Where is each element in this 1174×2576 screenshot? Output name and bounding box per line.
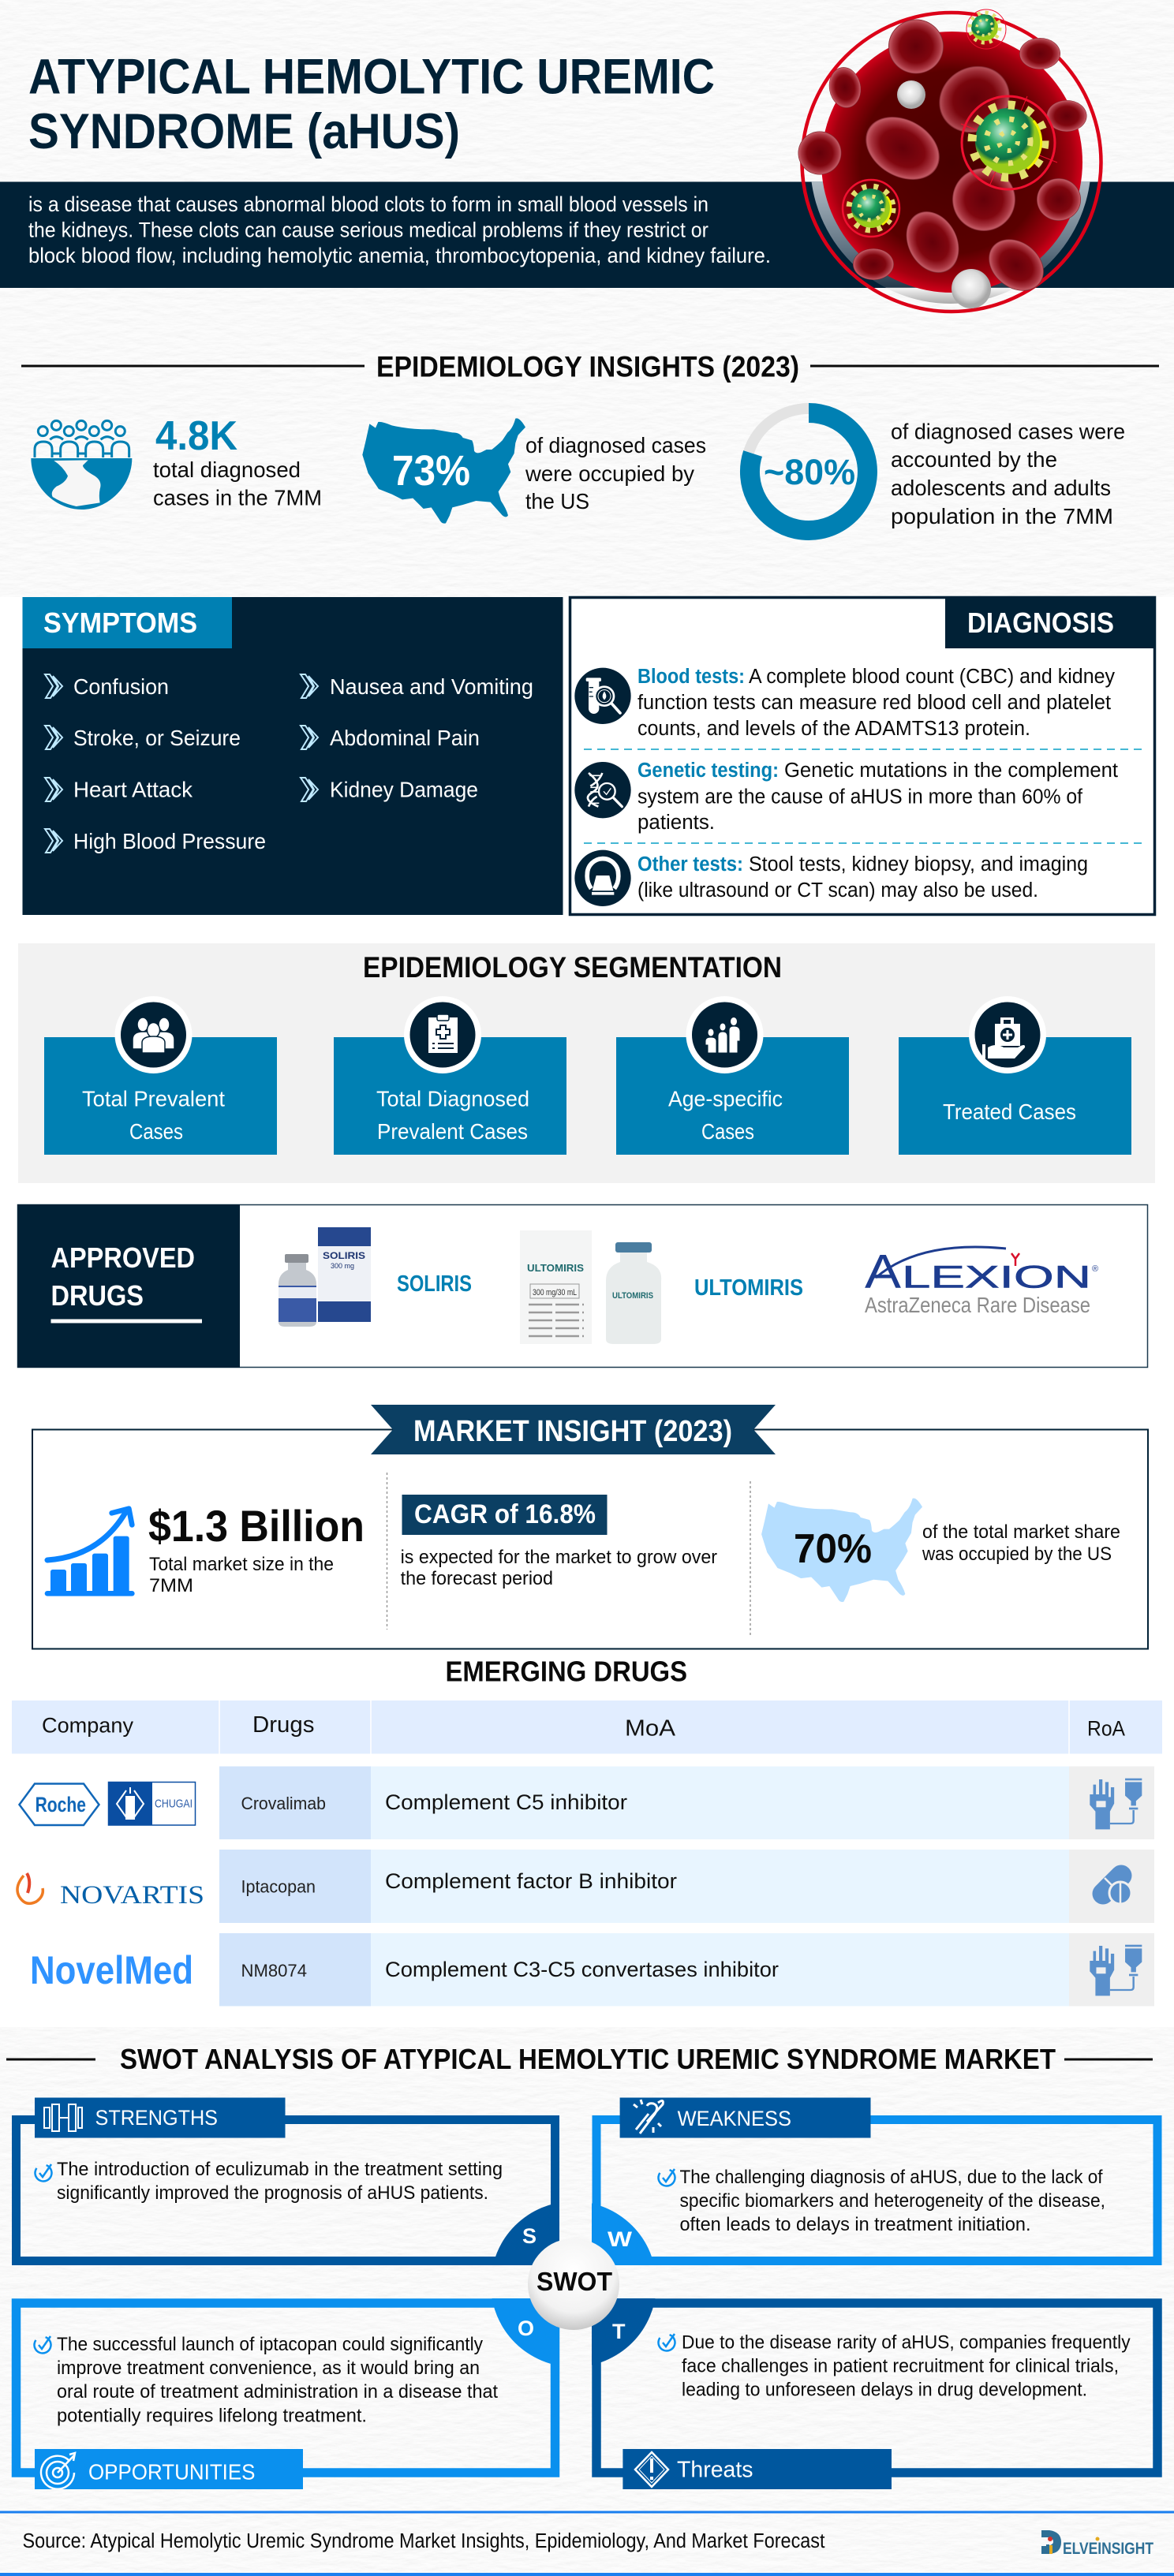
icon: genetic testing — [574, 762, 631, 818]
icon: oral pills — [1103, 1876, 1131, 1904]
row: crovalimab: Complement C5 inhibitor — [385, 1790, 627, 1814]
logo: Roche — [19, 1784, 99, 1825]
row: iptacopan: Iptacopan — [241, 1877, 316, 1896]
stat: 73% US — [362, 418, 706, 524]
stat: diagnosed cases: total diagnosed — [153, 457, 301, 482]
panel: market insight: Total market size in the — [149, 1554, 334, 1575]
ribbon heading: MARKET INSIGHT (2023) — [413, 1415, 732, 1448]
stat: diagnosed cases — [31, 413, 322, 510]
stat: 80% donut: adolescents and adults — [891, 476, 1111, 500]
stat: 73% US: the US — [525, 489, 589, 513]
title: SYNDROME (aHUS) — [28, 104, 460, 159]
panel: threats: Threats — [677, 2457, 753, 2482]
stat: 80% donut: ~80% — [764, 452, 855, 492]
stat: 80% donut: of diagnosed cases were — [891, 420, 1125, 443]
table: emerging drugs — [12, 1697, 1162, 2007]
icon: check — [33, 2163, 54, 2183]
stat: 80% donut — [749, 409, 1125, 530]
heading: emerging drugs: EMERGING DRUGS — [445, 1656, 687, 1688]
panel: threats — [592, 2298, 1162, 2489]
icon: warning diamond — [635, 2452, 668, 2487]
icon: US map light — [761, 1498, 922, 1602]
row: crovalimab — [19, 1767, 1154, 1839]
card: total diagnosed prevalent cases: Prevalent Cases — [377, 1119, 528, 1144]
logo: DelveInsight: ELVEINSIGHT — [1063, 2540, 1153, 2558]
CAGR callout — [402, 1495, 608, 1535]
table header — [12, 1697, 1162, 1754]
card: age-specific cases: Age-specific — [668, 1087, 783, 1111]
panel: symptoms: Kidney Damage — [330, 778, 478, 801]
panel: strengths — [12, 2098, 559, 2265]
panel: market insight: 70% — [794, 1526, 872, 1572]
logo: Alexion: A — [865, 1245, 901, 1298]
panel: diagnosis: DIAGNOSIS — [967, 607, 1114, 639]
panel: approved drugs: SOLIRIS — [397, 1271, 472, 1297]
CAGR callout: CAGR of 16.8% — [414, 1499, 596, 1529]
table header: Company — [42, 1714, 133, 1738]
stat: diagnosed cases: 4.8K — [155, 413, 237, 459]
panel: weakness: often leads to delays in treatment initiation. — [680, 2214, 1030, 2235]
text: other tests: Other tests: — [637, 853, 743, 875]
title: ATYPICAL HEMOLYTIC UREMIC — [28, 49, 715, 104]
stat: diagnosed cases: cases in the 7MM — [153, 486, 322, 510]
card: total prevalent cases — [44, 996, 277, 1155]
heading: epidemiology insights: EPIDEMIOLOGY INSIGHTS (2023) — [376, 350, 799, 383]
panel: symptoms: Nausea and Vomiting — [330, 674, 533, 699]
card: total diagnosed prevalent cases — [334, 996, 566, 1155]
panel: threats: leading to unforeseen delays in drug development. — [682, 2380, 1087, 2401]
card: treated cases: Treated Cases — [943, 1099, 1076, 1124]
table header: Drugs — [252, 1712, 314, 1738]
table header: MoA — [625, 1716, 676, 1742]
virus: top — [966, 9, 1006, 49]
stat: 80% donut: accounted by the — [891, 447, 1057, 472]
text: genetic testing: Genetic mutations in the complement — [784, 760, 1118, 782]
text: other tests: Stool tests, kidney biopsy, and imaging — [749, 853, 1088, 875]
product: Soliris: 300 mg — [331, 1262, 354, 1270]
panel: opportunities: O — [518, 2317, 534, 2340]
heading: epidemiology insights — [21, 350, 1159, 383]
logo: DelveInsight — [1041, 2530, 1153, 2558]
footer: Source: Atypical Hemolytic Uremic Syndrome Market Insights, Epidemiology, And Market Forecast — [22, 2530, 825, 2552]
panel: opportunities: improve treatment convenience, as it would bring an — [57, 2358, 480, 2379]
icon: check — [656, 2332, 677, 2353]
virus: lower left — [843, 180, 899, 237]
panel: opportunities — [11, 2298, 560, 2489]
panel: weakness: The challenging diagnosis of aHUS, due to the lack of — [680, 2167, 1103, 2188]
text: blood tests: Blood tests: — [637, 666, 745, 688]
panel: market insight: $1.3 Billion — [148, 1501, 365, 1551]
panel: strengths: The introduction of eculizumab in the treatment setting — [57, 2159, 503, 2180]
row: crovalimab: Crovalimab — [241, 1794, 326, 1813]
row: iptacopan — [17, 1850, 1154, 1923]
logo: Roche: Roche — [36, 1793, 86, 1816]
panel: market insight: the forecast period — [401, 1568, 553, 1589]
product: Ultomiris — [520, 1230, 661, 1344]
product: Soliris: SOLIRIS — [323, 1250, 365, 1261]
panel: diagnosis — [570, 596, 1156, 915]
panel: strengths: S — [522, 2224, 537, 2248]
text: other tests: (like ultrasound or CT scan) may also be used. — [637, 879, 1038, 902]
stat: 73% US: were occupied by — [525, 461, 694, 486]
icon: dumbbell — [44, 2104, 82, 2131]
title — [28, 49, 715, 159]
text: genetic testing — [637, 760, 1118, 834]
intro band: block blood flow, including hemolytic anemia, thrombocytopenia, and kidney failure. — [28, 244, 771, 267]
panel: opportunities: potentially requires lifelong treatment. — [57, 2406, 367, 2426]
logo: Chugai — [108, 1782, 196, 1825]
panel: symptoms: Confusion — [73, 674, 169, 699]
icon: check — [656, 2167, 677, 2188]
card: total diagnosed prevalent cases: Total Diagnosed — [376, 1087, 529, 1111]
text: genetic testing: patients. — [637, 812, 715, 834]
panel: epidemiology segmentation: EPIDEMIOLOGY SEGMENTATION — [363, 951, 782, 984]
intro band: is a disease that causes abnormal blood clots to form in small blood vessels in — [28, 192, 709, 216]
card: age-specific cases — [616, 996, 849, 1155]
icon: broken link — [634, 2100, 663, 2134]
text: blood tests — [637, 666, 1115, 740]
panel: approved drugs — [17, 1204, 1147, 1368]
donut chart — [749, 409, 867, 530]
panel: opportunities: The successful launch of iptacopan could significantly — [57, 2334, 484, 2355]
logo: Chugai: CHUGAI — [155, 1798, 193, 1811]
panel: symptoms — [22, 597, 563, 915]
panel: opportunities: OPPORTUNITIES — [88, 2460, 256, 2485]
panel: market insight: 7MM — [149, 1575, 193, 1596]
logo: Novartis: NOVARTIS — [60, 1881, 204, 1910]
text: other tests — [637, 853, 1088, 902]
panel: threats: T — [612, 2320, 626, 2343]
card: total prevalent cases: Total Prevalent — [82, 1087, 225, 1111]
icon: imaging scanner — [574, 850, 631, 906]
panel: strengths: significantly improved the prognosis of aHUS patients. — [57, 2182, 488, 2204]
virus: large — [961, 96, 1057, 189]
icon: blood test — [574, 668, 631, 724]
panel: epidemiology segmentation — [18, 943, 1155, 1183]
panel: approved drugs: DRUGS — [50, 1279, 144, 1312]
panel: approved drugs: APPROVED — [50, 1241, 195, 1274]
panel: symptoms: High Blood Pressure — [73, 829, 266, 853]
panel: market insight: was occupied by the US — [922, 1544, 1112, 1565]
panel: threats: Due to the disease rarity of aHUS, companies frequently — [682, 2331, 1131, 2353]
panel: weakness: W — [608, 2227, 633, 2251]
SWOT centre badge: SWOT — [537, 2267, 612, 2296]
panel: weakness: WEAKNESS — [678, 2107, 791, 2130]
card: age-specific cases: Cases — [701, 1119, 754, 1144]
panel: symptoms: Heart Attack — [73, 778, 193, 801]
logo: NovelMed: NovelMed — [30, 1948, 193, 1992]
logo: Alexion: ® — [1092, 1264, 1098, 1274]
logo: Alexion: LEXION — [902, 1260, 1091, 1295]
text: genetic testing: Genetic testing: — [637, 760, 779, 782]
row: NM8074: NM8074 — [241, 1961, 307, 1981]
panel: symptoms: Stroke, or Seizure — [73, 726, 241, 750]
card: total prevalent cases: Cases — [129, 1119, 183, 1144]
icon: growth chart — [45, 1509, 135, 1596]
SWOT centre badge — [528, 2238, 619, 2330]
panel: approved drugs: ULTOMIRIS — [694, 1275, 803, 1301]
panel: weakness: specific biomarkers and heterogeneity of the disease, — [680, 2190, 1105, 2212]
panel: opportunities: oral route of treatment administration in a disease that — [57, 2381, 498, 2402]
logo: Novartis — [17, 1873, 204, 1910]
panel: symptoms: SYMPTOMS — [43, 607, 197, 639]
logo: Alexion — [865, 1245, 1098, 1317]
hero illustration: blood cells and viruses — [798, 9, 1101, 312]
panel: market insight: of the total market share — [922, 1521, 1120, 1543]
icon: intravenous — [1090, 1779, 1142, 1829]
product: Soliris — [279, 1227, 371, 1327]
text: blood tests: counts, and levels of the ADAMTS13 protein. — [637, 718, 1030, 740]
product: Ultomiris: ULTOMIRIS — [527, 1262, 584, 1274]
panel: weakness — [592, 2098, 1161, 2265]
stat: 80% donut: population in the 7MM — [891, 504, 1113, 528]
icon: people on globe — [31, 420, 132, 510]
panel: strengths: STRENGTHS — [95, 2106, 218, 2130]
text: blood tests: function tests can measure red blood cell and platelet — [637, 692, 1111, 714]
product: Ultomiris: 300 mg/30 mL — [533, 1288, 577, 1297]
panel: market insight: is expected for the market to grow over — [401, 1547, 717, 1568]
row: NM8074: Complement C3-C5 convertases inhibitor — [385, 1958, 779, 1981]
row: iptacopan: Complement factor B inhibitor — [385, 1869, 677, 1893]
text: genetic testing: system are the cause of aHUS in more than 60% of — [637, 786, 1083, 808]
panel: market insight — [32, 1405, 1148, 1648]
stat: 73% US: of diagnosed cases — [525, 433, 706, 457]
panel: symptoms: Abdominal Pain — [330, 726, 480, 750]
stat: 73% US: 73% — [392, 447, 470, 495]
row: NM8074 — [30, 1933, 1154, 2007]
icon: US map — [362, 418, 525, 524]
ribbon heading — [371, 1405, 776, 1454]
logo: Alexion: AstraZeneca Rare Disease — [865, 1293, 1090, 1317]
icon: target — [41, 2453, 75, 2489]
footer — [0, 2511, 1174, 2576]
table header: RoA — [1087, 1717, 1125, 1741]
intro band: the kidneys. These clots can cause serious medical problems if they restrict or — [28, 218, 709, 242]
intro band — [0, 181, 1174, 288]
text: blood tests: A complete blood count (CBC) and kidney — [749, 666, 1115, 688]
heading: SWOT analysis: SWOT ANALYSIS OF ATYPICAL HEMOLYTIC UREMIC SYNDROME MARKET — [120, 2043, 1056, 2075]
product: Ultomiris: ULTOMIRIS — [612, 1291, 653, 1301]
icon: intravenous — [1090, 1945, 1142, 1995]
icon: check — [32, 2335, 53, 2355]
panel: threats: face challenges in patient recruitment for clinical trials, — [682, 2355, 1119, 2377]
card: treated cases — [899, 996, 1131, 1155]
